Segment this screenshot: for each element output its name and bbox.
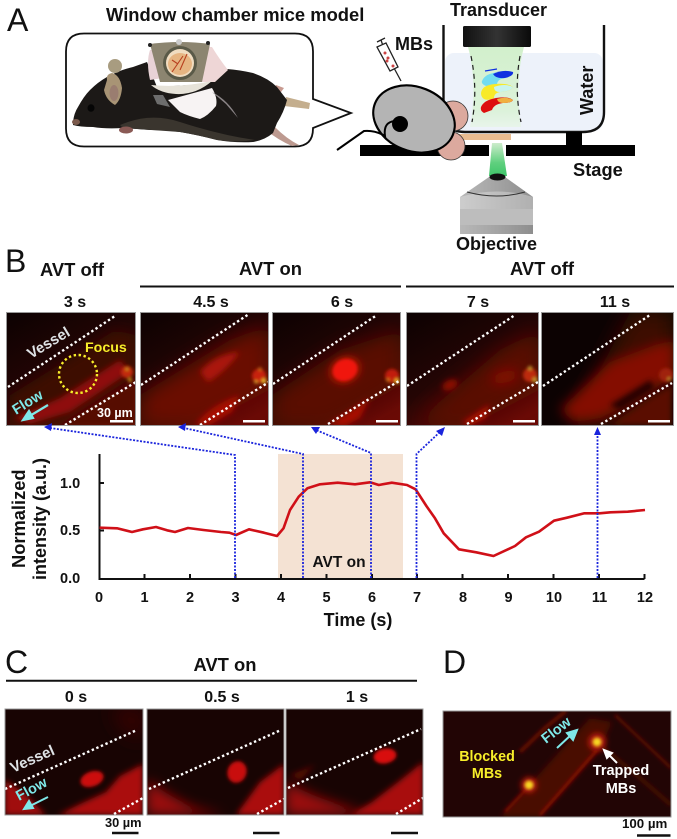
time labels: 11 s [600,294,630,311]
label: Flow: Flow [539,714,575,747]
time labels [64,294,630,311]
icon: syringe [377,38,401,81]
y tick labels: 0.0 [60,571,80,587]
x axis title: Time (s) [324,610,392,630]
scale bars [112,832,418,834]
micrograph: 6 s [272,312,401,426]
label: Vessel: Vessel [8,742,57,777]
time labels: 4.5 s [193,294,229,311]
blue dotted connector arrows [44,423,601,578]
icon: transducer [463,26,531,47]
x tick labels: 2 [186,590,194,606]
micrograph: 7 s [406,312,539,426]
panel D label: D [443,644,466,680]
micrograph: 11 s [541,312,674,426]
x tick labels: 3 [231,590,240,606]
tank [444,25,604,132]
y tick labels: 1.0 [60,476,80,492]
x tick labels: 7 [413,590,421,606]
axes [99,454,644,579]
y axis title: Normalized [8,469,29,568]
label: Water: Water [577,66,597,115]
x tick labels: 11 [592,590,607,606]
AVT on band [278,454,403,578]
x tick labels: 1 [140,590,149,606]
time labels: 6 s [331,294,353,311]
AVT on label: AVT on [312,554,366,571]
mouse head schematic [337,74,468,164]
heading: AVT on: AVT on [194,654,256,675]
scale bar [637,834,670,837]
stage [360,132,635,156]
heading bar [6,680,417,682]
label: Vessel: Vessel [24,324,73,362]
x tick labels: 0 [95,590,103,606]
label: Objective: Objective [456,234,537,254]
sample plate [455,134,511,140]
y axis title line 2: intensity (a.u.) [30,458,50,580]
water [445,53,603,131]
label: Flow: Flow [13,775,51,805]
label: Blocked MBs: Blocked [459,749,515,765]
label: 0 s: 0 s [65,689,87,706]
panel B label: B [5,243,26,279]
scale bar [110,420,133,422]
x tick labels: 9 [504,590,513,606]
heading: AVT off: AVT off [510,258,575,279]
label: Stage: Stage [573,159,623,180]
label: Flow: Flow [10,387,47,418]
micrograph: 3 s [6,312,136,426]
x tick labels: 6 [368,590,376,606]
focus circle [59,355,97,393]
x tick labels: 5 [322,590,331,606]
label: 100 um: 100 µm [622,816,667,831]
panel A label: A [7,2,29,38]
heading bars [140,286,674,288]
beam boundaries [471,56,521,122]
label: Trapped MBs: Trapped [593,763,649,779]
label: 30 um: 30 µm [97,406,133,420]
y tick labels [60,476,80,587]
label: Trapped MBs: MBs [606,781,636,797]
time labels: 7 s [467,294,489,311]
x tick labels [95,590,653,606]
acoustic vortex field [481,69,513,113]
intensity line chart [8,454,653,630]
label: 1 s: 1 s [346,689,368,706]
speech bubble with mouse photo [66,34,351,146]
label: Focus: Focus [85,340,127,356]
intensity curve [100,482,645,556]
label: Blocked MBs: MBs [472,766,502,782]
label: 30 um: 30 µm [105,815,142,830]
label: Transducer: Transducer [450,0,547,20]
icon: mouse photo [72,39,310,146]
label: MBs: MBs [395,34,433,54]
panel C label: C [5,644,28,680]
heading: AVT off: AVT off [40,259,105,280]
panel A setup schematic [337,25,635,234]
micrograph: C 0.5 s [147,709,284,815]
label: 0.5 s: 0.5 s [204,689,240,706]
icon: objective lens [460,174,533,234]
y tick labels: 0.5 [60,523,80,539]
green light [489,143,507,176]
micrograph: C 0 s [5,709,143,815]
panel A title: Window chamber mice model [106,4,364,25]
x tick labels: 10 [546,590,562,606]
x tick labels: 8 [459,590,467,606]
ultrasound beam [468,47,524,127]
micrograph: C 1 s [286,709,423,815]
flow arrow [23,405,48,420]
x tick labels: 12 [637,590,653,606]
micrograph: 4.5 s [140,312,269,426]
x tick labels: 4 [277,590,285,606]
time labels: 3 s [64,294,86,311]
micrograph: D [443,711,671,817]
heading: AVT on: AVT on [239,258,302,279]
